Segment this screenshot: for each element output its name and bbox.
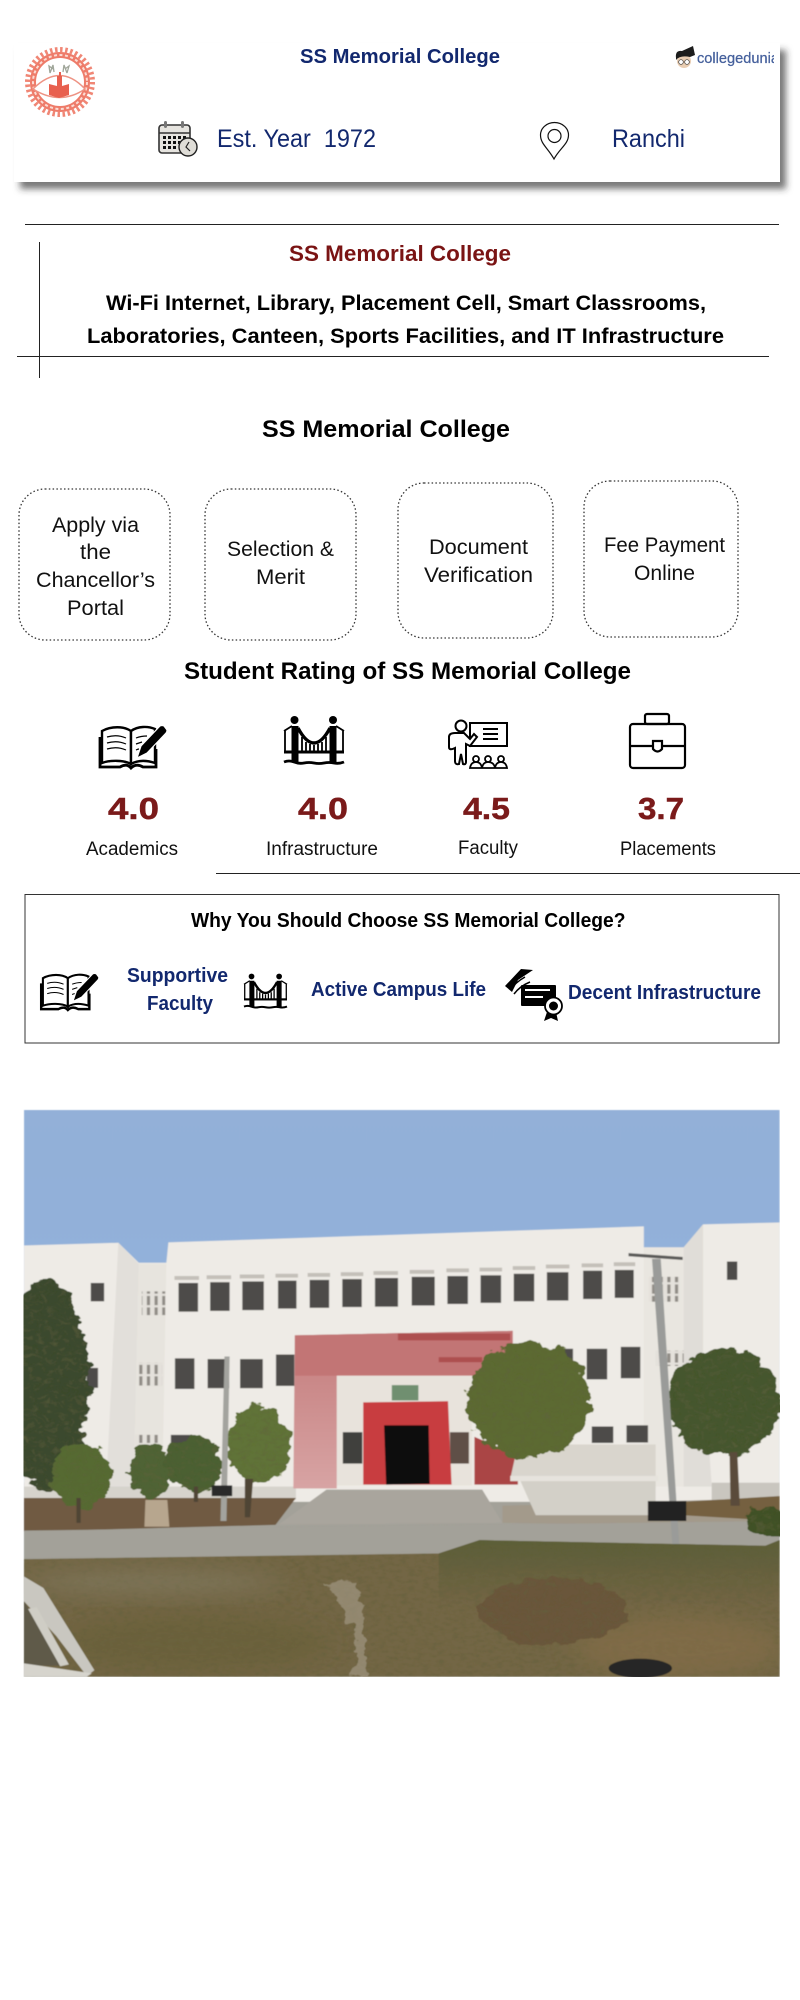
reason: active campus life: Active Campus Life (311, 979, 486, 1001)
step: selection and merit: Merit (256, 566, 305, 589)
step: apply via portal: Apply via (52, 514, 139, 537)
rating: placements (620, 714, 716, 860)
rating: faculty (449, 720, 518, 859)
step: apply via portal (19, 489, 170, 640)
step: document verification (398, 483, 553, 638)
reason: active campus life (244, 974, 486, 1008)
step: apply via portal: Chancellor’s (36, 569, 155, 592)
reason: supportive faculty (41, 965, 228, 1015)
rating: placements: 3.7 (638, 791, 684, 826)
college logo seal (28, 50, 92, 114)
step: apply via portal: the (80, 541, 111, 564)
rating: infrastructure: 4.0 (298, 791, 348, 826)
reason: supportive faculty: Faculty (147, 993, 214, 1015)
admission heading: SS Memorial College (262, 416, 510, 443)
header card (14, 43, 780, 182)
reason: supportive faculty: Supportive (127, 965, 228, 987)
rating: academics: Academics (86, 839, 178, 860)
facilities panel (17, 224, 779, 378)
rating: placements: Placements (620, 839, 716, 860)
facilities list: Wi-Fi Internet, Library, Placement Cell, Smart Classrooms, (106, 292, 706, 315)
icon: calendar with clock (159, 121, 197, 156)
step: document verification: Document (429, 536, 528, 559)
step: selection and merit (205, 489, 356, 640)
location: Ranchi (612, 125, 685, 153)
step: fee payment: Fee Payment (604, 534, 725, 557)
facilities list: Laboratories, Canteen, Sports Facilities, and IT Infrastructure (87, 325, 724, 348)
college building photo (3, 1110, 786, 1678)
rating: academics (86, 726, 178, 860)
foliage (3, 1280, 786, 1536)
collegedunia logo (676, 46, 780, 68)
reason: decent infrastructure: Decent Infrastructure (568, 982, 761, 1004)
icon: location pin (540, 122, 568, 159)
heading: college name: SS Memorial College (300, 46, 500, 68)
step: fee payment: Online (634, 562, 695, 585)
rating: faculty: 4.5 (463, 791, 510, 826)
panel: why choose (25, 894, 779, 1043)
step: fee payment (584, 481, 738, 637)
step: selection and merit: Selection & (227, 538, 334, 561)
facilities heading: SS Memorial College (289, 241, 511, 266)
rating: infrastructure: Infrastructure (266, 839, 378, 860)
why choose heading: Why You Should Choose SS Memorial College? (191, 910, 626, 932)
facilities list (87, 292, 724, 348)
step: apply via portal: Portal (67, 597, 124, 620)
established year: Est. Year 1972 (217, 125, 376, 153)
rating: faculty: Faculty (458, 838, 518, 859)
reason: decent infrastructure (505, 969, 761, 1021)
collegedunia logo: collegedunia (697, 50, 780, 67)
rating: academics: 4.0 (108, 791, 159, 826)
step: document verification: Verification (424, 564, 533, 587)
rating: infrastructure (266, 716, 378, 860)
foreground grass (24, 1540, 780, 1677)
ratings heading: Student Rating of SS Memorial College (184, 658, 631, 685)
